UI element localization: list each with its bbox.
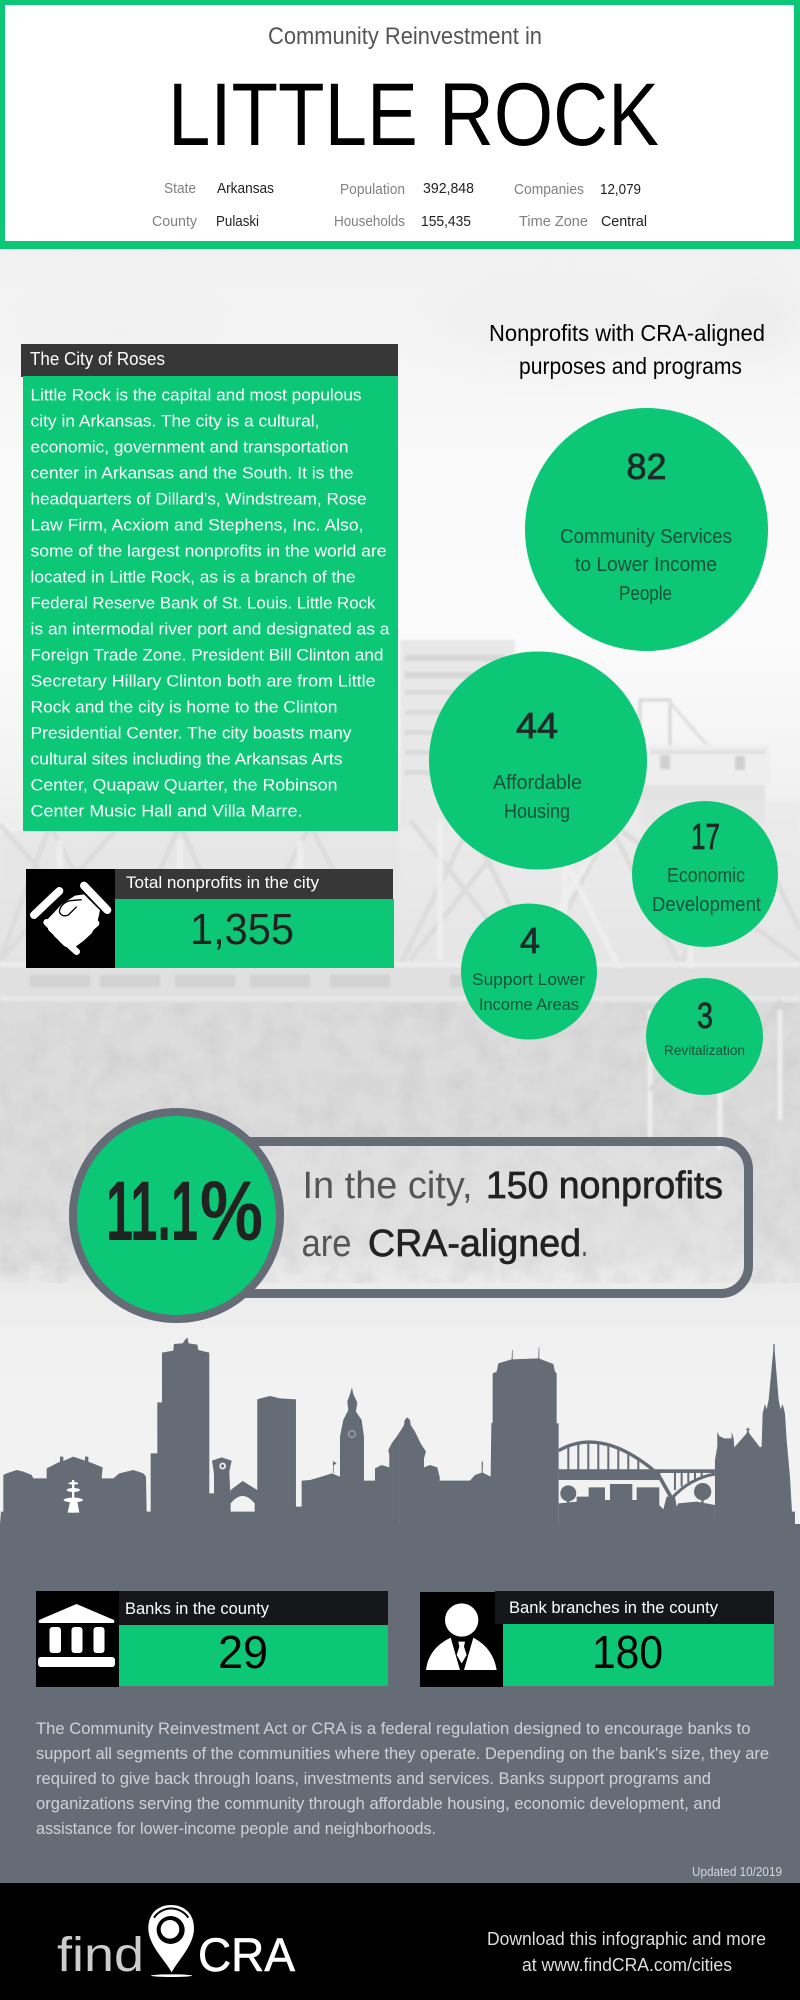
icon: bank bbox=[38, 1604, 115, 1667]
text block: city description: located in Little Rock, as is a branch of the bbox=[30, 568, 356, 587]
callout text: CRA-aligned bbox=[368, 1223, 581, 1265]
text block: about the CRA: The Community Reinvestment Act or CRA is a federal regulation designed to encourage banks to bbox=[36, 1719, 750, 1738]
heading: nonprofits with CRA-aligned purposes and programs bbox=[489, 320, 765, 379]
text block: about the CRA: organizations serving the community through affordable housing, economic development, and bbox=[36, 1794, 721, 1813]
heading: nonprofits with CRA-aligned purposes and programs: purposes and programs bbox=[519, 353, 742, 379]
heading: nonprofits with CRA-aligned purposes and programs: Nonprofits with CRA-aligned bbox=[489, 320, 765, 346]
text block: city description: cultural sites including the Arkansas Arts bbox=[30, 750, 342, 769]
bubble: 44 affordable housing: 44 bbox=[516, 705, 558, 746]
callout text: are bbox=[302, 1223, 352, 1265]
bubble: 4 support lower income areas: Income Areas bbox=[479, 995, 579, 1014]
city stats: Time Zone bbox=[519, 213, 588, 230]
bubble: 82 community services: to Lower Income bbox=[575, 554, 717, 576]
text block: city description: Center, Quapaw Quarter, the Robinson bbox=[30, 776, 338, 795]
text block: city description: Center Music Hall and Villa Marre. bbox=[30, 802, 302, 821]
text block: city description: headquarters of Dillard's, Windstream, Rose bbox=[30, 490, 366, 509]
number: 29: 29 bbox=[218, 1626, 268, 1678]
text block: city description: is an intermodal river port and designated as a bbox=[30, 620, 390, 639]
number: 1,355: 1,355 bbox=[190, 905, 294, 954]
bubble: 82 community services: People bbox=[619, 583, 672, 605]
text block: city description: Foreign Trade Zone. President Bill Clinton and bbox=[30, 646, 384, 665]
updated date: Updated 10/2019 bbox=[692, 1864, 782, 1879]
bubble: 17 economic development: Development bbox=[652, 894, 761, 916]
text block: city description: economic, government and transportation bbox=[30, 438, 349, 457]
callout text: 150 nonprofits bbox=[486, 1165, 723, 1207]
download text: at www.findCRA.com/cities bbox=[522, 1955, 732, 1975]
text block: city description: Secretary Hillary Clinton both are from Little bbox=[30, 672, 376, 691]
text block: city description: some of the largest nonprofits in the world are bbox=[30, 542, 386, 561]
title: LITTLE ROCK bbox=[168, 64, 659, 164]
bubble: 4 support lower income areas: 4 bbox=[520, 920, 540, 961]
panel: banks in the county bbox=[36, 1591, 388, 1687]
panel: the city of roses bbox=[21, 344, 398, 831]
callout text bbox=[302, 1165, 723, 1265]
bubble: 17 economic development bbox=[632, 801, 778, 947]
text block: city description: Rock and the city is home to the Clinton bbox=[30, 698, 338, 717]
bubble: 4 support lower income areas: Support Lower bbox=[472, 970, 585, 989]
text block: city description: Presidential Center. The city boasts many bbox=[30, 724, 352, 743]
bubble: 82 community services: Community Services bbox=[560, 526, 732, 548]
city stats: 155,435 bbox=[421, 213, 471, 230]
callout: 11.1% CRA-aligned bbox=[73, 1112, 748, 1319]
percent circle bbox=[73, 1112, 280, 1319]
panel: bank branches in the county bbox=[420, 1591, 774, 1687]
bubble: 17 economic development: 17 bbox=[691, 816, 720, 857]
percent circle: % bbox=[200, 1164, 263, 1258]
city stats bbox=[152, 180, 647, 230]
bubble: 82 community services bbox=[525, 408, 768, 651]
fountain bbox=[64, 1480, 83, 1513]
icon: banker bbox=[426, 1603, 497, 1670]
label: banks in the county: Banks in the county bbox=[125, 1599, 269, 1618]
bubble: 3 revitalization: 3 bbox=[697, 995, 713, 1036]
panel: total nonprofits bbox=[26, 869, 394, 968]
download text bbox=[487, 1929, 766, 1975]
number: 180: 180 bbox=[592, 1626, 663, 1678]
text block: about the CRA: assistance for lower-income people and neighborhoods. bbox=[36, 1819, 436, 1838]
city stats: Central bbox=[601, 213, 647, 230]
bubble: 82 community services: 82 bbox=[626, 446, 666, 487]
bubble: 17 economic development: Economic bbox=[667, 865, 745, 887]
logo: findCRA: CRA bbox=[198, 1928, 296, 1981]
callout text: In the city, bbox=[302, 1165, 472, 1207]
background photo: Little Rock bridge in grey bbox=[0, 249, 800, 1539]
city stats: 12,079 bbox=[600, 181, 641, 198]
city stats: Companies bbox=[514, 181, 584, 198]
text block: city description bbox=[23, 376, 398, 831]
percent circle: 11.1 bbox=[106, 1164, 198, 1258]
skyline bbox=[0, 1337, 800, 1884]
title: Community Reinvestment in bbox=[268, 23, 542, 50]
city stats: Population bbox=[340, 181, 405, 198]
city stats: Pulaski bbox=[216, 213, 259, 230]
bubble: 44 affordable housing bbox=[429, 652, 647, 870]
logo: findCRA bbox=[57, 1905, 296, 1982]
bubble: 44 affordable housing: Housing bbox=[504, 801, 570, 823]
left skyline buildings bbox=[0, 1337, 400, 1530]
bubble: 3 revitalization bbox=[646, 978, 763, 1095]
city stats: State bbox=[164, 180, 196, 197]
heading: the city of roses: The City of Roses bbox=[30, 349, 165, 369]
download text: Download this infographic and more bbox=[487, 1929, 766, 1949]
text block: about the CRA: required to give back through loans, investments and services. Banks support programs and bbox=[36, 1769, 711, 1788]
city stats: 392,848 bbox=[423, 180, 474, 197]
title bbox=[168, 23, 659, 164]
bubble: 3 revitalization: Revitalization bbox=[664, 1042, 745, 1058]
right skyline buildings and bridge bbox=[400, 1344, 800, 1530]
logo: findCRA: find bbox=[57, 1929, 144, 1982]
text block: city description: Little Rock is the capital and most populous bbox=[30, 386, 361, 405]
label: bank branches in the county: Bank branches in the county bbox=[509, 1598, 718, 1617]
heading: the city of roses bbox=[21, 344, 398, 377]
city stats: County bbox=[152, 213, 197, 230]
icon: handshake bbox=[34, 886, 107, 952]
callout text: . bbox=[581, 1223, 588, 1265]
bubble: 4 support lower income areas bbox=[461, 904, 597, 1040]
label: total nonprofits in the city: Total nonprofits in the city bbox=[126, 873, 319, 892]
text block: city description: city in Arkansas. The city is a cultural, bbox=[30, 412, 320, 431]
text block: city description: Law Firm, Acxiom and Stephens, Inc. Also, bbox=[30, 516, 364, 535]
text block: about the CRA bbox=[36, 1719, 769, 1838]
text block: city description: Federal Reserve Bank of St. Louis. Little Rock bbox=[30, 594, 376, 613]
text block: about the CRA: support all segments of the communities where they operate. Depending on the bank's size, they are bbox=[36, 1744, 769, 1763]
city stats: Households bbox=[334, 213, 405, 230]
text block: city description: center in Arkansas and the South. It is the bbox=[30, 464, 354, 483]
footer bbox=[0, 1883, 800, 2000]
bubble: 44 affordable housing: Affordable bbox=[493, 772, 582, 794]
header panel bbox=[0, 0, 800, 249]
city stats: Arkansas bbox=[217, 180, 274, 197]
